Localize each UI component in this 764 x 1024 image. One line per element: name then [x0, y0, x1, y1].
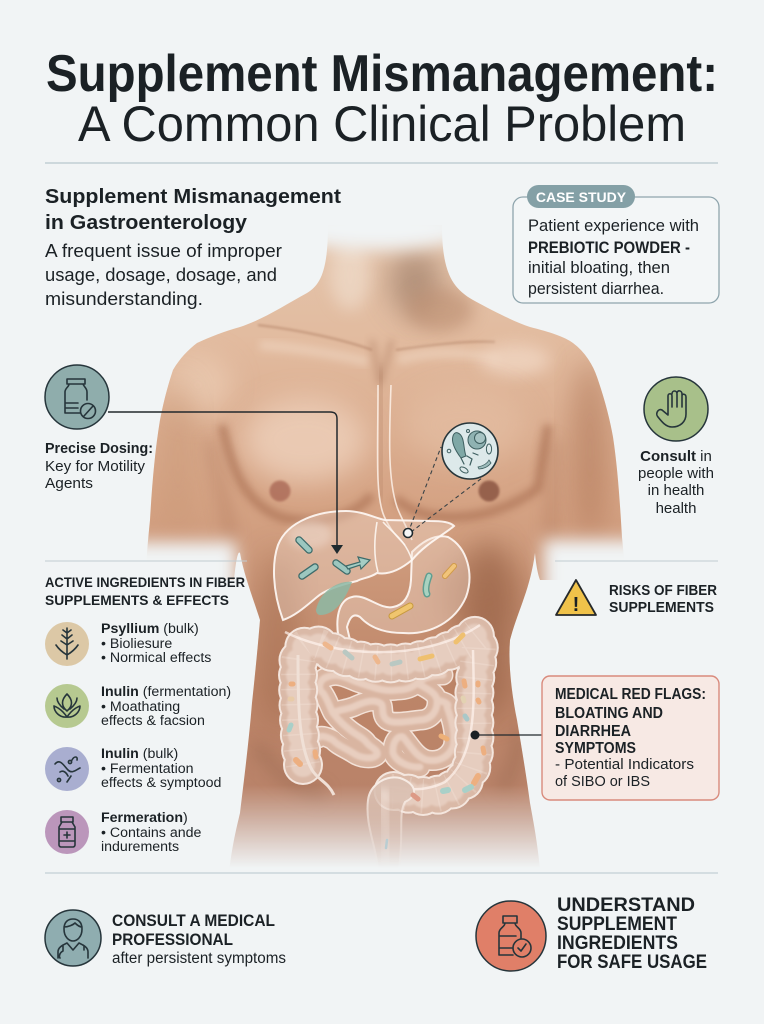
panel: active ingredients: SUPPLEMENTS & EFFECTS	[45, 592, 229, 608]
icon: doctor	[45, 910, 101, 966]
icon: bottle with no sign	[45, 365, 109, 429]
callout: risks of fiber supplements	[556, 580, 717, 616]
neck shadow	[389, 248, 441, 316]
rectum	[366, 776, 415, 852]
ingredient: fermeration: Fermeration)	[101, 810, 188, 826]
ingredient: inulin fermentation: • Moathating	[101, 699, 180, 715]
ingredient: fermeration	[45, 810, 202, 855]
liver	[274, 511, 454, 620]
callout: consult: Consult in	[640, 448, 712, 465]
callout: consult	[638, 377, 714, 517]
panel: medical red flags: of SIBO or IBS	[555, 773, 650, 790]
ingredient: inulin fermentation: Inulin (fermentation)	[101, 684, 231, 700]
intro text block: A frequent issue of improper	[45, 240, 282, 261]
footer: consult a medical professional	[45, 910, 286, 967]
title: A Common Clinical Problem	[78, 96, 686, 152]
callout: precise dosing: Key for Motility	[45, 458, 146, 475]
stomach	[337, 536, 469, 640]
ingredient: psyllium: Psyllium (bulk)	[101, 621, 199, 637]
title	[46, 45, 718, 152]
panel: case study: CASE STUDY	[536, 189, 627, 205]
callout: consult: health	[656, 500, 696, 517]
intro text block: Supplement Mismanagement	[45, 185, 341, 208]
footer: understand supplement ingredients: INGREDIENTS	[557, 933, 678, 954]
panel: case study: persistent diarrhea.	[528, 280, 664, 298]
digestive organs	[274, 385, 484, 870]
ingredient: psyllium: • Normical effects	[101, 650, 211, 666]
intro text block: in Gastroenterology	[45, 211, 248, 234]
icon: warning triangle	[556, 580, 596, 615]
gallbladder	[316, 582, 352, 615]
panel: medical red flags	[470, 676, 719, 800]
title: Supplement Mismanagement:	[46, 45, 718, 103]
footer: understand supplement ingredients: FOR SAFE USAGE	[557, 952, 707, 973]
callout: precise dosing: Precise Dosing:	[45, 440, 153, 457]
bacteria in liver and stomach	[299, 540, 454, 616]
callout: consult: people with	[638, 465, 714, 482]
callout: precise dosing	[45, 365, 343, 554]
callout: risks of fiber supplements: RISKS OF FIBER	[609, 583, 717, 599]
ingredient: inulin bulk: effects & symptood	[101, 775, 221, 791]
ingredient: psyllium	[45, 621, 211, 666]
panel: case study: Patient experience with	[528, 217, 699, 235]
footer: consult a medical professional: PROFESSIONAL	[112, 930, 233, 949]
panel: active ingredients	[45, 574, 245, 855]
panel: case study	[513, 185, 719, 303]
nipples	[270, 480, 500, 502]
pectorals	[243, 398, 367, 482]
ingredient: fermeration: • Contains ande	[101, 825, 202, 841]
panel: medical red flags: MEDICAL RED FLAGS:	[555, 686, 706, 703]
panel: case study: initial bloating, then	[528, 259, 670, 277]
ingredient: inulin fermentation	[45, 684, 231, 729]
footer: understand supplement ingredients	[476, 895, 707, 973]
callout: risks of fiber supplements: !	[573, 594, 579, 616]
torso illustration	[147, 234, 623, 864]
esophagus	[378, 385, 412, 545]
callout: risks of fiber supplements: SUPPLEMENTS	[609, 600, 714, 616]
intro text block	[45, 185, 341, 309]
icon: bottle with check	[476, 901, 546, 971]
small intestine	[318, 675, 454, 767]
ingredient: inulin fermentation: effects & facsion	[101, 713, 205, 729]
clavicles	[258, 325, 495, 350]
footer: understand supplement ingredients: SUPPLEMENT	[557, 914, 677, 935]
gut bacteria	[289, 635, 484, 848]
shoulders	[164, 355, 232, 415]
small arrow	[346, 557, 370, 569]
icon: microbe magnifier with dashed pointers	[404, 423, 498, 538]
ingredient: inulin bulk: • Fermentation	[101, 761, 194, 777]
panel: medical red flags: SYMPTOMS	[555, 740, 636, 757]
ingredient: psyllium: • Bioliesure	[101, 636, 172, 652]
abdomen shadows	[466, 540, 514, 720]
panel: active ingredients: ACTIVE INGREDIENTS IN FIBER	[45, 574, 245, 590]
ingredient: inulin bulk: Inulin (bulk)	[101, 746, 178, 762]
icon: hand	[644, 377, 708, 441]
footer: consult a medical professional: CONSULT A MEDICAL	[112, 911, 275, 930]
panel: medical red flags: DIARRHEA	[555, 723, 631, 740]
large intestine	[285, 625, 480, 796]
footer: understand supplement ingredients: UNDERSTAND	[557, 895, 695, 916]
intro text block: usage, dosage, dosage, and	[45, 264, 277, 285]
ingredient: inulin bulk	[45, 746, 221, 791]
panel: medical red flags: BLOATING AND	[555, 705, 663, 722]
panel: medical red flags: - Potential Indicators	[555, 756, 694, 773]
callout: consult: in health	[648, 482, 704, 499]
panel: case study: PREBIOTIC POWDER -	[528, 239, 690, 257]
ingredient: fermeration: indurements	[101, 839, 179, 855]
footer: consult a medical professional: after persistent symptoms	[112, 950, 286, 967]
intro text block: misunderstanding.	[45, 288, 203, 309]
callout: precise dosing: Agents	[45, 475, 93, 492]
